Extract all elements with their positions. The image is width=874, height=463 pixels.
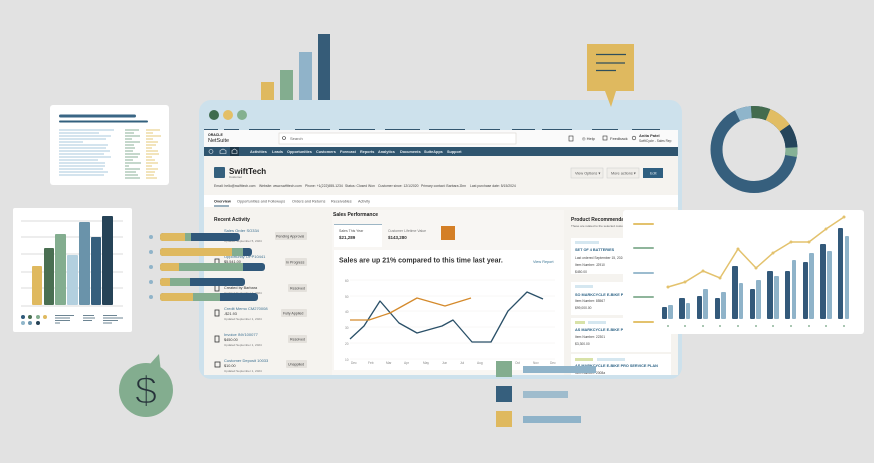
axis dots <box>667 325 845 327</box>
navigation bar: Customers <box>316 150 336 154</box>
company header: Customer since: 12/1/2020 <box>378 184 419 188</box>
recent activity panel: Updated September 5, 2024 <box>224 239 262 243</box>
tabs: Opportunities and Followups <box>237 200 285 204</box>
window control dots <box>209 110 247 120</box>
tabs <box>204 195 678 207</box>
recent activity panel: Resolved <box>290 338 305 342</box>
app header: ORACLE <box>208 133 223 137</box>
recent activity panel: Sales Order SO334 <box>224 228 260 233</box>
recent activity panel: Updated September 1, 2024 <box>224 369 262 373</box>
product recommendations panel: Product Recommendations <box>571 217 636 223</box>
chart card: Jul <box>460 361 464 365</box>
navigation bar: Analytics <box>378 150 395 154</box>
navigation bar: Documents <box>400 150 421 154</box>
app header: SwiftCycle - Sales Rep <box>639 139 672 143</box>
chart card: Feb <box>368 361 374 365</box>
legend squares and bars <box>496 361 596 427</box>
navigation bar: Support <box>447 150 462 154</box>
chart card: 30 <box>345 326 349 330</box>
company header: SwiftTech <box>229 167 266 176</box>
chart card: 20 <box>345 342 349 346</box>
product recommendations panel: AS MARKCYCLE E-BIKE PRO C <box>575 328 633 332</box>
company header: Customer <box>229 175 242 179</box>
document card <box>50 105 169 185</box>
orange square <box>441 226 455 240</box>
recent activity panel: Unapplied <box>288 362 304 366</box>
recent activity panel: Updated September 1, 2024 <box>224 317 262 321</box>
metric tab: customer lifetime value <box>388 229 426 240</box>
product recommendations panel: Item Number: 85567 <box>575 299 605 303</box>
recent activity panel: Created by Barbara <box>224 286 258 290</box>
product recommendations panel: SO MARKCYCLE E-BIKE PRO <box>575 293 629 297</box>
recent activity panel: Updated September 1, 2024 <box>224 343 262 347</box>
company header: More actions ▾ <box>611 172 636 176</box>
metric tab: sales this year <box>334 224 382 247</box>
company header: Status: Closed Won <box>345 184 375 188</box>
recent activity panel: -$21.93 <box>224 312 237 316</box>
recent activity panel: Invoice INV100077 <box>224 332 259 337</box>
gold trend line <box>666 216 846 288</box>
product recommendations panel: SET OF 4 BATTERIES <box>575 248 615 252</box>
tabs: Overview <box>214 200 231 204</box>
chart card: Nov <box>533 361 539 365</box>
donut chart <box>702 97 806 202</box>
line: this year <box>350 292 543 342</box>
chart card: Oct <box>515 361 520 365</box>
app header: Search <box>290 136 303 141</box>
chart card: Mar <box>386 361 392 365</box>
line: last year <box>350 298 471 320</box>
product recommendations panel: $450.00 <box>575 270 587 274</box>
recent activity panel: Updated September 2, 2024 <box>224 291 262 295</box>
product recommendations panel: Item Number: 22301 <box>575 335 605 339</box>
combo chart card <box>623 210 864 334</box>
dollar speech bubble: $ <box>135 369 157 413</box>
product recommendations panel <box>571 217 671 375</box>
tabs: Receivables <box>331 200 352 204</box>
company header: View Options ▾ <box>575 172 600 176</box>
recent activity panel: Customer Deposit 10033 <box>224 358 269 363</box>
product recommendations panel: AS MARKCYCLE E-BIKE PRO SERVICE PLAN <box>575 364 658 368</box>
recent activity panel: $10.00 <box>224 364 236 368</box>
recent activity panel: Recent Activity <box>214 217 250 223</box>
company header: Last purchase date: 5/15/2024 <box>470 184 516 188</box>
company header: Phone: +1(222)555-1234 <box>305 184 343 188</box>
navigation bar: SuiteApps <box>424 150 443 154</box>
recent activity panel: Resolved <box>290 286 305 290</box>
recent activity panel: $450.00 <box>224 338 238 342</box>
metric tab: customer lifetime value: Customer Lifetime Value <box>388 229 426 233</box>
product recommendations panel: These are related to the selected customer <box>571 224 628 228</box>
company header <box>214 167 663 188</box>
company header: Edit <box>650 172 657 176</box>
bar chart card <box>13 208 132 332</box>
chart card: Aug <box>477 361 483 365</box>
company header: Primary contact: Barbara Zinn <box>421 184 466 188</box>
recent activity panel: Pending Approval <box>276 234 304 238</box>
product recommendations panel: Item Number: 2008a <box>575 371 605 375</box>
product recommendations panel: $99,000.00 <box>575 306 592 310</box>
navigation bar: Forecast <box>340 150 357 154</box>
recent activity panel: $5,541.00 <box>224 260 241 264</box>
speech bubble with lines <box>587 44 634 107</box>
chart card: 60 <box>345 279 349 283</box>
app header <box>204 130 678 147</box>
recent activity panel: In Progress <box>286 260 305 264</box>
product recommendations panel: Item Number: J2910 <box>575 263 605 267</box>
chart card: Sales are up 21% compared to this time last year. <box>339 258 503 264</box>
recent activity panel: Credit Memo CM270008 <box>224 306 268 311</box>
product recommendations panel: $3,300.00 <box>575 342 590 346</box>
recent activity panel: Opportunity OPP10441 <box>224 254 266 259</box>
tabs: Orders and Returns <box>292 200 325 204</box>
metric tab: customer lifetime value: $143,280 <box>388 235 407 240</box>
app header: ◎ Help <box>582 136 596 141</box>
chart card <box>334 250 564 370</box>
chart card: Dec <box>351 361 357 365</box>
recent activity panel: Fully Applied <box>283 312 303 316</box>
browser window <box>199 100 682 379</box>
sales performance panel <box>332 210 564 375</box>
navigation bar: Reports <box>360 150 374 154</box>
company header: Website: www.swifttech.com <box>259 184 302 188</box>
chart card: Apr <box>404 361 410 365</box>
stacked horizontal bars <box>149 233 265 301</box>
chart card: 10 <box>345 358 349 362</box>
sales performance panel: Sales Performance <box>333 212 378 218</box>
chart card: Jun <box>442 361 447 365</box>
tabs: Activity <box>358 200 370 204</box>
product recommendations panel: Last ordered September 15, 2024 <box>575 256 624 260</box>
navigation bar: Opportunities <box>287 150 312 154</box>
recent activity panel <box>214 217 307 373</box>
metric tab: sales this year: Sales This Year <box>339 229 364 233</box>
light bars <box>668 236 849 319</box>
navigation bar: Leads <box>272 150 283 154</box>
dark bars <box>662 228 843 319</box>
chart card: 40 <box>345 310 349 314</box>
app header: Feedback <box>610 136 628 141</box>
metric tab: sales this year: $21,289 <box>339 235 356 240</box>
navigation bar <box>204 147 678 156</box>
rising bar chart icon <box>261 34 330 100</box>
chart card: 50 <box>345 295 349 299</box>
chart legend ticks <box>634 224 653 322</box>
company header: Email: hello@swifttech.com <box>214 184 256 188</box>
app header: NetSuite <box>208 138 229 144</box>
app header: Anita Patel <box>639 133 660 138</box>
chart legend <box>21 315 123 325</box>
navigation bar: Activities <box>250 150 267 154</box>
chart card: View Report <box>533 260 555 264</box>
dollar speech bubble <box>119 354 173 417</box>
chart card: May <box>423 361 429 365</box>
chart card: Dec <box>550 361 556 365</box>
